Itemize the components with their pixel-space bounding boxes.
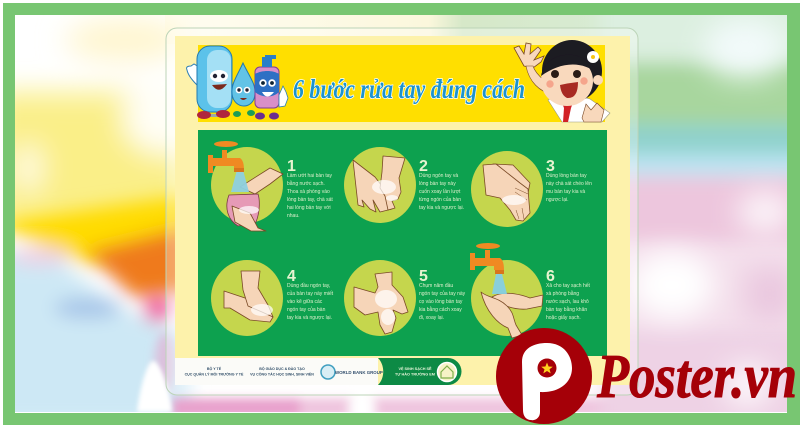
step 4 text: của bàn tay này miết (287, 290, 334, 297)
step 5 text: Chụm năm đầu (419, 283, 453, 289)
step 5 text: 5 (419, 268, 428, 285)
footer world bank logo: WORLD BANK GROUP (335, 370, 383, 375)
step 1 text: hai lòng bàn tay với (287, 205, 331, 211)
icon: school badge (438, 362, 456, 382)
step 2 text (419, 158, 464, 211)
step 3 (471, 151, 543, 227)
step 6 text: nước sạch, lau khô (546, 299, 589, 305)
step 5 text: cọ vào lòng bàn tay (419, 299, 463, 305)
step 1 text: Làm ướt hai bàn tay (287, 173, 332, 179)
step 1 text: bằng nước sạch. (287, 180, 325, 187)
step 2 text: lòng bàn tay này (419, 181, 456, 187)
title: 6 bước rửa tay đúng cách (293, 74, 525, 104)
step 4 text: vào kẽ giữa các (287, 299, 323, 305)
step 3 text: mu bàn tay kia và (546, 189, 585, 195)
step 4 text: tay kia và ngược lại. (287, 315, 332, 321)
step 4 text: ngón tay của bàn (287, 306, 326, 313)
step 2 text: từng ngón của bàn (419, 196, 461, 203)
step 5 text: ngón tay của tay này (419, 290, 466, 297)
step 1 text: nhau. (287, 213, 300, 219)
step 6 text (546, 268, 591, 321)
footer ministry of health: CỤC QUẢN LÝ MÔI TRƯỜNG Y TẾ (185, 372, 244, 376)
poster card (166, 28, 638, 395)
footer logos strip (175, 358, 462, 385)
yellow title banner (198, 45, 605, 122)
step 5 text: kia bằng cách xoay (419, 306, 462, 313)
footer world bank logo (321, 365, 383, 379)
step 3 text: ngược lại. (546, 197, 568, 203)
step 3 text (546, 158, 592, 203)
footer ministry of education: VỤ CÔNG TÁC HỌC SINH, SINH VIÊN (250, 372, 314, 376)
step 4 text (287, 268, 334, 321)
logo circle with P (496, 328, 592, 424)
green instructions panel (198, 130, 607, 356)
step 6 text: bàn tay bằng khăn (546, 306, 587, 313)
icon: waving schoolgirl (514, 40, 610, 122)
step 5 text (419, 268, 466, 321)
step 1 text: Thoa xà phòng vào (287, 189, 330, 195)
step 1 text: 1 (287, 158, 296, 175)
step 6 text: 6 (546, 268, 555, 285)
step 6 text: Xả cho tay sạch hết (546, 283, 591, 289)
step 5 text: đi, xoay lại. (419, 315, 444, 321)
step 4 (211, 260, 283, 336)
step 4 text: Dùng đầu ngón tay, (287, 283, 330, 289)
footer green pill (378, 358, 462, 385)
icon: soap, water drop and bottle characters (187, 46, 288, 120)
step 6 text: xà phòng bằng (546, 290, 579, 297)
step 2 text: tay kia và ngược lại. (419, 205, 464, 211)
step 1 (208, 141, 283, 231)
step 6 (470, 243, 543, 338)
step 3 text: Dùng lòng bàn tay (546, 173, 587, 179)
step 1 text (287, 158, 333, 219)
step 4 text: 4 (287, 268, 296, 285)
step 2 text: cuốn xoay lần lượt (419, 189, 461, 195)
step 2 text: 2 (419, 158, 428, 175)
step 3 text: này chà sát chéo lên (546, 181, 592, 187)
logo: Poster.vn (496, 328, 797, 424)
step 6 text: hoặc giấy sạch. (546, 315, 581, 321)
footer ministry of education: BỘ GIÁO DỤC & ĐÀO TẠO (259, 366, 305, 371)
step 3 text: 3 (546, 158, 555, 175)
step 5 (344, 260, 416, 336)
step 1 text: lòng bàn tay, chà sát (287, 197, 333, 203)
footer logos strip: TỰ HÀO TRƯỜNG EM (395, 372, 435, 376)
step 2 (344, 147, 416, 223)
step 2 text: Dùng ngón tay và (419, 173, 458, 179)
footer ministry of health: BỘ Y TẾ (207, 366, 222, 371)
cream poster sheet (175, 36, 630, 385)
footer logos strip: VỆ SINH SẠCH SẼ (398, 366, 432, 371)
